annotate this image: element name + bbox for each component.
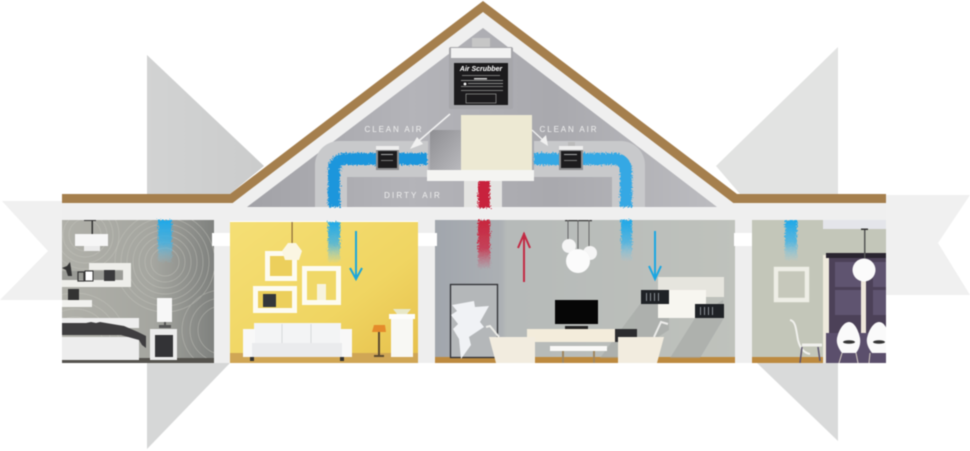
small unit left	[376, 146, 399, 170]
label: clean air left: CLEAN AIR	[365, 125, 423, 134]
house roof	[62, 1, 886, 221]
arrow: to right duct	[532, 130, 548, 146]
air scrubber main unit	[449, 38, 513, 109]
chandelier	[75, 220, 108, 251]
wall square frame	[776, 269, 807, 300]
label: clean air right: CLEAN AIR	[540, 125, 598, 134]
sofa	[243, 323, 352, 361]
dining chair one	[837, 322, 860, 363]
room: dining	[752, 220, 888, 363]
white shelf	[427, 170, 534, 181]
room: yellow lounge	[230, 222, 418, 363]
red dirty air in duct	[478, 180, 490, 208]
coffee table	[550, 346, 607, 363]
wall shelves	[62, 262, 131, 307]
red air stream	[478, 220, 490, 268]
label: dirty air: DIRTY AIR	[384, 191, 442, 200]
wall light blocks	[212, 233, 752, 246]
left backdrop shapes	[0, 55, 264, 449]
attic	[247, 28, 717, 208]
arrow: down	[649, 231, 661, 279]
small unit right	[559, 142, 583, 170]
arrow: up	[518, 233, 530, 282]
side chair	[790, 320, 822, 363]
bed	[62, 318, 146, 360]
blue air stream	[621, 220, 632, 260]
blue air stream	[328, 222, 340, 262]
wall shadows	[600, 290, 724, 358]
attic duct ring	[315, 141, 645, 207]
arrow: down	[350, 231, 362, 279]
dining chair two	[867, 322, 888, 363]
air scrubber main unit: Air Scrubber	[459, 66, 503, 73]
floor	[752, 357, 824, 363]
side lamp	[372, 325, 386, 357]
doorway	[823, 253, 886, 363]
floor	[435, 357, 735, 363]
blue clean air duct left	[334, 159, 427, 207]
floor	[230, 353, 418, 363]
floor	[62, 358, 214, 363]
dark return plenum	[430, 130, 462, 170]
arrow: to left duct	[410, 114, 450, 149]
room: living room	[435, 220, 735, 363]
walls	[214, 220, 752, 363]
right backdrop shapes	[716, 47, 970, 441]
television	[555, 300, 598, 329]
ceiling pendant lights	[562, 220, 597, 273]
pendant globe	[852, 228, 876, 282]
blue air stream	[158, 220, 172, 262]
media console	[527, 329, 637, 342]
mirror with abstract art	[450, 284, 498, 359]
wallpaper rings	[115, 220, 214, 358]
nightstand and lamp	[150, 298, 177, 360]
armchair left	[486, 326, 535, 363]
armchair right	[618, 322, 668, 363]
pendant lamp	[282, 222, 302, 260]
centre return duct	[464, 180, 502, 207]
frame objects	[263, 284, 326, 307]
pedestal and bowl	[389, 309, 415, 357]
wall cabinets	[641, 277, 724, 318]
beige air handler	[461, 115, 532, 171]
blue clean air duct right	[534, 159, 626, 207]
blue air stream	[785, 220, 797, 260]
room: bedroom	[61, 218, 215, 364]
wall frames	[256, 254, 338, 310]
